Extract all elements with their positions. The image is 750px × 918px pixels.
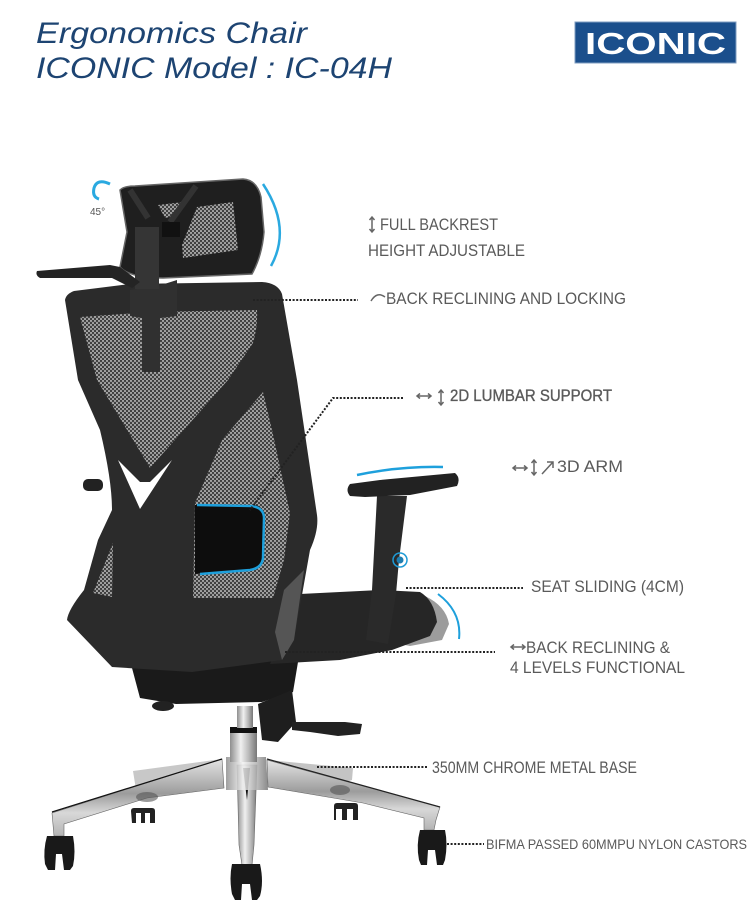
callout: back reclining and locking	[253, 290, 626, 308]
chair: seat tilt arc	[438, 594, 459, 639]
chair: lower mesh panel	[193, 392, 290, 598]
chair: upper mesh panel	[80, 310, 257, 468]
icon: headrest arc	[263, 184, 280, 266]
logo: ICONIC	[575, 22, 736, 63]
chair: side mesh panel	[93, 543, 113, 597]
callout: full backrest height adjustable: HEIGHT ADJUSTABLE	[368, 242, 525, 260]
callout: back reclining and 4 levels functional: BACK RECLINING &	[526, 639, 670, 657]
title: ICONIC Model : IC-04H	[36, 52, 392, 85]
chair: backrest frame	[65, 282, 317, 672]
icon: 45 degree rotation: 45°	[90, 207, 105, 218]
callout: back reclining and 4 levels functional: 4 LEVELS FUNCTIONAL	[510, 659, 685, 677]
callout: 3D arm: 3D ARM	[557, 458, 623, 476]
callout: full backrest height adjustable	[368, 216, 525, 260]
callout: chrome metal base: 350MM CHROME METAL BASE	[432, 759, 637, 777]
callout: back reclining and 4 levels functional	[285, 639, 685, 677]
chair: lumbar pad	[195, 505, 264, 574]
callout: 2D lumbar support	[250, 387, 612, 510]
title	[36, 17, 392, 85]
chair: armrest	[348, 467, 459, 644]
callout: seat sliding: SEAT SLIDING (4CM)	[531, 578, 684, 596]
chair: frame highlight	[275, 570, 304, 660]
chair: front casters	[44, 830, 446, 900]
chair: back caster and base legs	[131, 759, 358, 823]
title: Ergonomics Chair	[36, 17, 308, 50]
callout: full backrest height adjustable: FULL BACKREST	[380, 216, 498, 234]
chair: seat	[270, 590, 449, 664]
chair: headrest post	[130, 280, 177, 372]
callout: 2D lumbar support: 2D LUMBAR SUPPORT	[450, 387, 612, 405]
chair illustration	[36, 179, 459, 900]
chair: star base	[52, 706, 440, 865]
chair: white V mark	[118, 460, 172, 509]
chair: side handle stub	[83, 479, 103, 491]
callout: 3D arm	[513, 458, 623, 476]
callout: back reclining and locking: BACK RECLINING AND LOCKING	[386, 290, 626, 308]
logo: ICONIC: ICONIC	[585, 26, 726, 61]
chair: headrest	[36, 179, 264, 289]
icon: 45 degree rotation	[90, 182, 110, 218]
chair: tilt mechanism and lever	[132, 650, 362, 742]
